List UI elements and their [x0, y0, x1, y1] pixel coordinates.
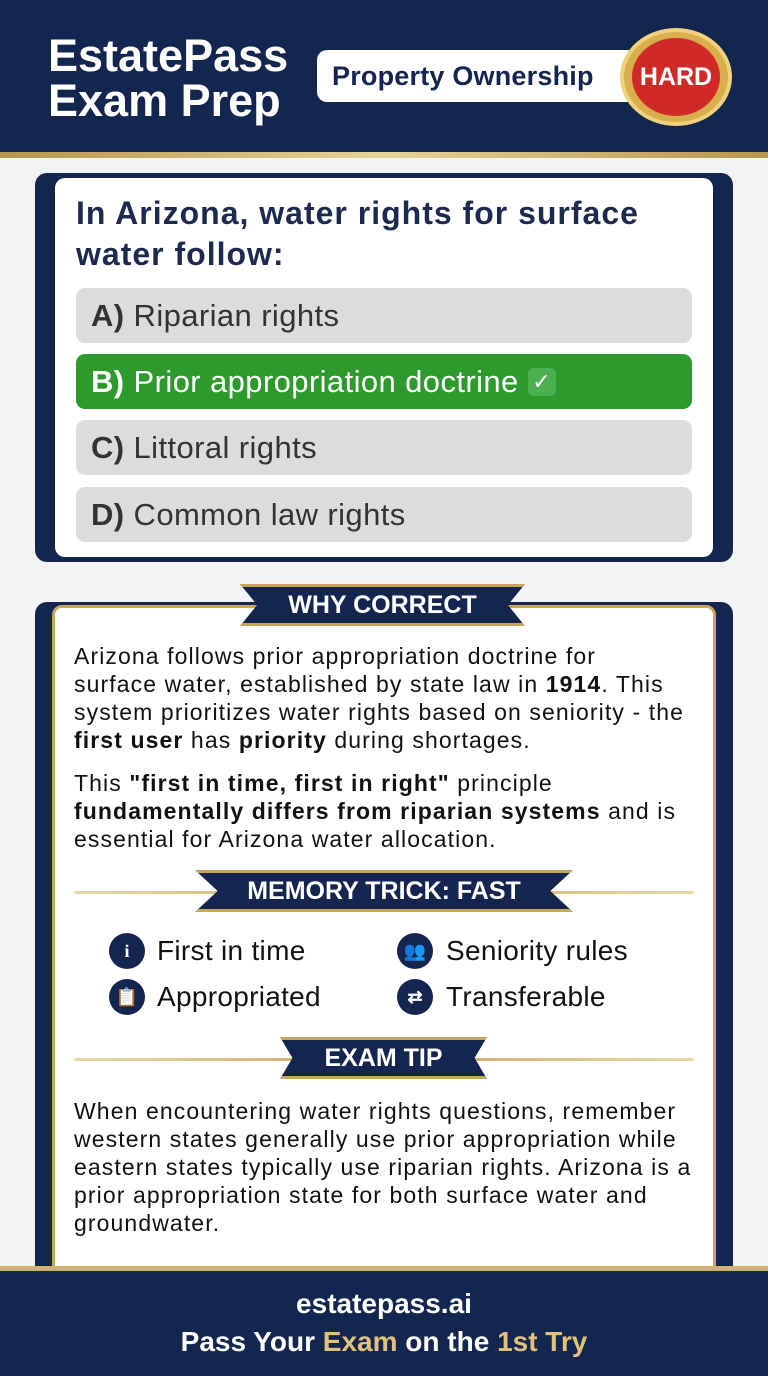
- question text: [76, 195, 639, 272]
- memory items: First in time: [157, 935, 306, 966]
- explanation text: system prioritizes water rights based on seniority - the: [74, 699, 684, 725]
- icon: clipboard: 📋: [116, 987, 138, 1007]
- icon: info: i: [124, 941, 130, 961]
- icon: clipboard: [109, 979, 145, 1015]
- icon: transfer: [397, 979, 433, 1015]
- question text: In Arizona, water rights for surface: [76, 195, 639, 231]
- exam tip text: eastern states typically use riparian rights. Arizona is a: [74, 1154, 691, 1180]
- icon: people: [397, 933, 433, 969]
- question text: water follow:: [76, 236, 285, 272]
- header: [0, 0, 768, 152]
- option B correct: ✓: [532, 369, 551, 394]
- option C: [76, 420, 692, 475]
- footer: [0, 1266, 768, 1376]
- title: Exam Prep: [48, 75, 281, 126]
- option D: D) Common law rights: [91, 497, 406, 532]
- banner: exam tip: EXAM TIP: [324, 1044, 443, 1072]
- explanation text: Arizona follows prior appropriation doctrine for: [74, 643, 596, 669]
- exam tip text: [74, 1098, 691, 1236]
- difficulty badge: HARD: [640, 63, 712, 91]
- option A: [76, 288, 692, 343]
- category pill: Property Ownership: [332, 61, 594, 91]
- explanation text 2: This "first in time, first in right" principle: [74, 770, 553, 796]
- option B correct: [76, 354, 692, 409]
- difficulty badge: [620, 28, 732, 126]
- banner: memory trick: MEMORY TRICK: FAST: [247, 877, 521, 905]
- exam tip text: western states generally use prior appropriation while: [74, 1126, 677, 1152]
- icon: info: [109, 933, 145, 969]
- option B correct: B) Prior appropriation doctrine: [91, 364, 519, 399]
- memory items: [109, 933, 628, 1015]
- panel: question: [35, 173, 733, 562]
- category pill: [317, 50, 637, 102]
- option A: A) Riparian rights: [91, 298, 339, 333]
- icon: transfer: ⇄: [407, 987, 423, 1007]
- option C: C) Littoral rights: [91, 430, 317, 465]
- explanation text: [74, 643, 684, 753]
- exam tip text: groundwater.: [74, 1210, 220, 1236]
- title: EstatePass: [48, 30, 288, 81]
- tagline: Pass Your Exam on the 1st Try: [181, 1326, 587, 1357]
- explanation text 2: [74, 770, 676, 852]
- icon: people: 👥: [404, 941, 426, 961]
- exam tip text: When encountering water rights questions, remember: [74, 1098, 676, 1124]
- title: [48, 30, 288, 126]
- explanation text: first user has priority during shortages.: [74, 727, 531, 753]
- explanation text 2: essential for Arizona water allocation.: [74, 826, 497, 852]
- panel: explanation: [35, 602, 733, 1282]
- banner: why correct: WHY CORRECT: [288, 591, 477, 619]
- memory items: Transferable: [446, 981, 606, 1012]
- memory items: Appropriated: [157, 981, 321, 1012]
- explanation text: surface water, established by state law in 1914. This: [74, 671, 664, 697]
- memory items: Seniority rules: [446, 935, 628, 966]
- exam tip text: prior appropriation state for both surface water and: [74, 1182, 648, 1208]
- option D: [76, 487, 692, 542]
- explanation text 2: fundamentally differs from riparian systems and is: [74, 798, 676, 824]
- footer url: estatepass.ai: [296, 1288, 472, 1319]
- banner: memory trick: [195, 870, 573, 912]
- banner: why correct: [240, 584, 525, 626]
- banner: exam tip: [280, 1037, 487, 1079]
